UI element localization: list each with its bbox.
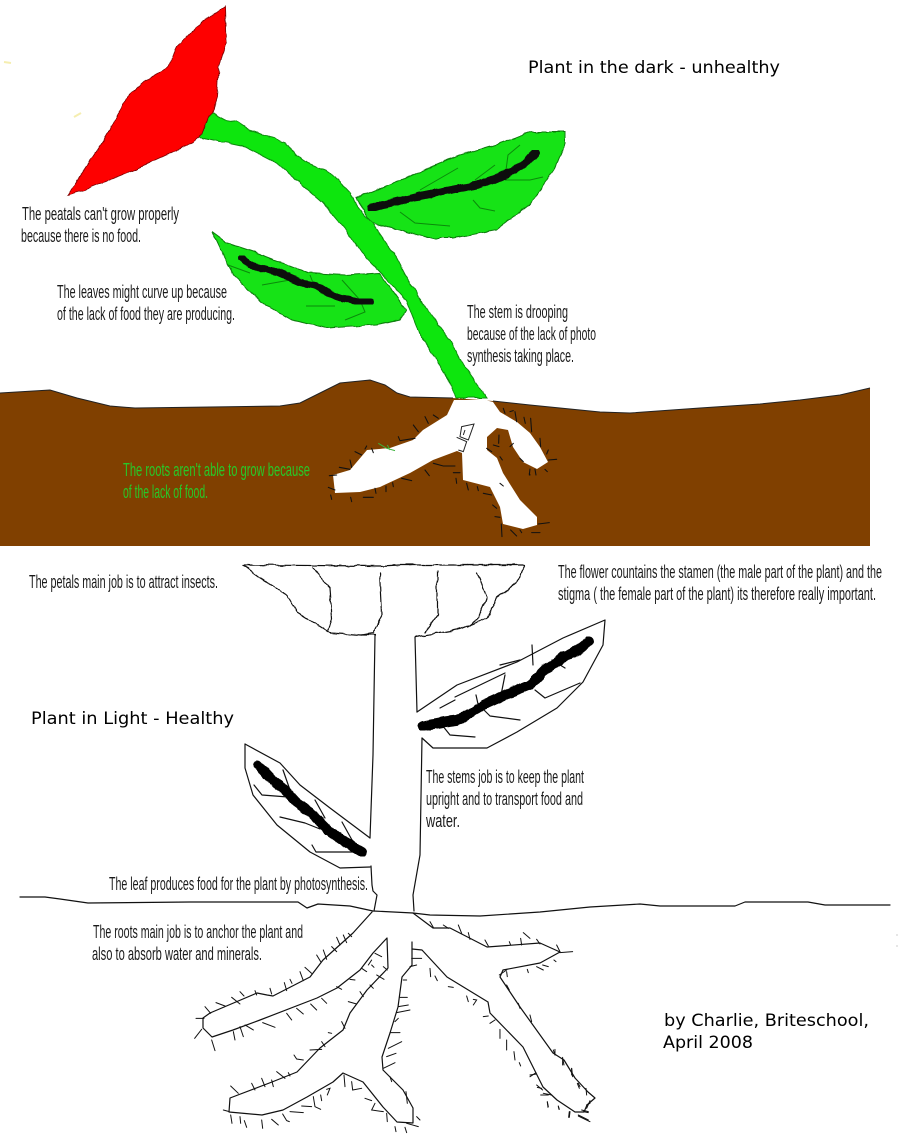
panel: plant in the dark — [0, 6, 870, 546]
root outlines — [195, 912, 595, 1133]
soil — [0, 380, 870, 546]
text: petals: The peatals can't grow properly — [22, 204, 179, 224]
panel: plant in light — [20, 562, 897, 1133]
text: stems job — [425, 767, 584, 831]
root hairs: lower right tip — [530, 1050, 590, 1122]
right leaf outline — [417, 620, 605, 748]
text: flower — [558, 562, 882, 604]
text: stem: synthesis taking place. — [467, 346, 574, 366]
root hairs — [328, 408, 557, 537]
flower outline — [243, 565, 525, 637]
red flower — [67, 6, 226, 195]
text: roots job — [92, 922, 303, 964]
text: petals — [21, 204, 179, 246]
text: roots in green: of the lack of food. — [123, 482, 208, 502]
root hairs — [195, 922, 590, 1133]
white roots — [333, 400, 548, 529]
left leaf — [212, 232, 406, 328]
text: petals: because there is no food. — [21, 226, 141, 246]
soil outline — [0, 380, 870, 413]
small stamp marks — [457, 424, 474, 452]
credit: April 2008 — [663, 1033, 753, 1053]
left leaf outline — [245, 744, 370, 868]
text: stems job: The stems job is to keep the plant — [426, 767, 584, 787]
title: plant in the dark: Plant in the dark - unhealthy — [528, 58, 780, 78]
text: roots job: also to absorb water and minerals. — [92, 944, 262, 964]
right leaf — [356, 132, 565, 238]
title: plant in light: Plant in Light - Healthy — [31, 709, 234, 729]
text: stem — [467, 302, 596, 366]
stem — [200, 113, 487, 398]
text: roots in green: The roots aren't able to grow because — [123, 460, 310, 480]
credit: by Charlie, Briteschool, — [664, 1011, 869, 1031]
text: leaves: The leaves might curve up because — [57, 282, 227, 302]
green marks — [378, 443, 395, 451]
text: petals job: The petals main job is to attract insects. — [29, 572, 218, 592]
text: roots job: The roots main job is to anchor the plant and — [93, 922, 303, 942]
text: stem: The stem is drooping — [467, 302, 568, 322]
text: roots in green — [123, 460, 310, 502]
edge mark — [896, 934, 898, 956]
text: leaves — [57, 282, 235, 324]
text: stems job: upright and to transport food and — [426, 789, 583, 809]
text: stem: because of the lack of photo — [467, 324, 596, 344]
text: leaves: of the lack of food they are producing. — [57, 304, 235, 324]
text: leaf: The leaf produces food for the plant by photosynthesis. — [109, 874, 368, 894]
stem outline — [370, 635, 422, 911]
credit — [663, 1011, 869, 1053]
ground line — [20, 897, 890, 916]
text: stems job: water. — [425, 811, 460, 831]
yellow specks — [4, 62, 81, 117]
